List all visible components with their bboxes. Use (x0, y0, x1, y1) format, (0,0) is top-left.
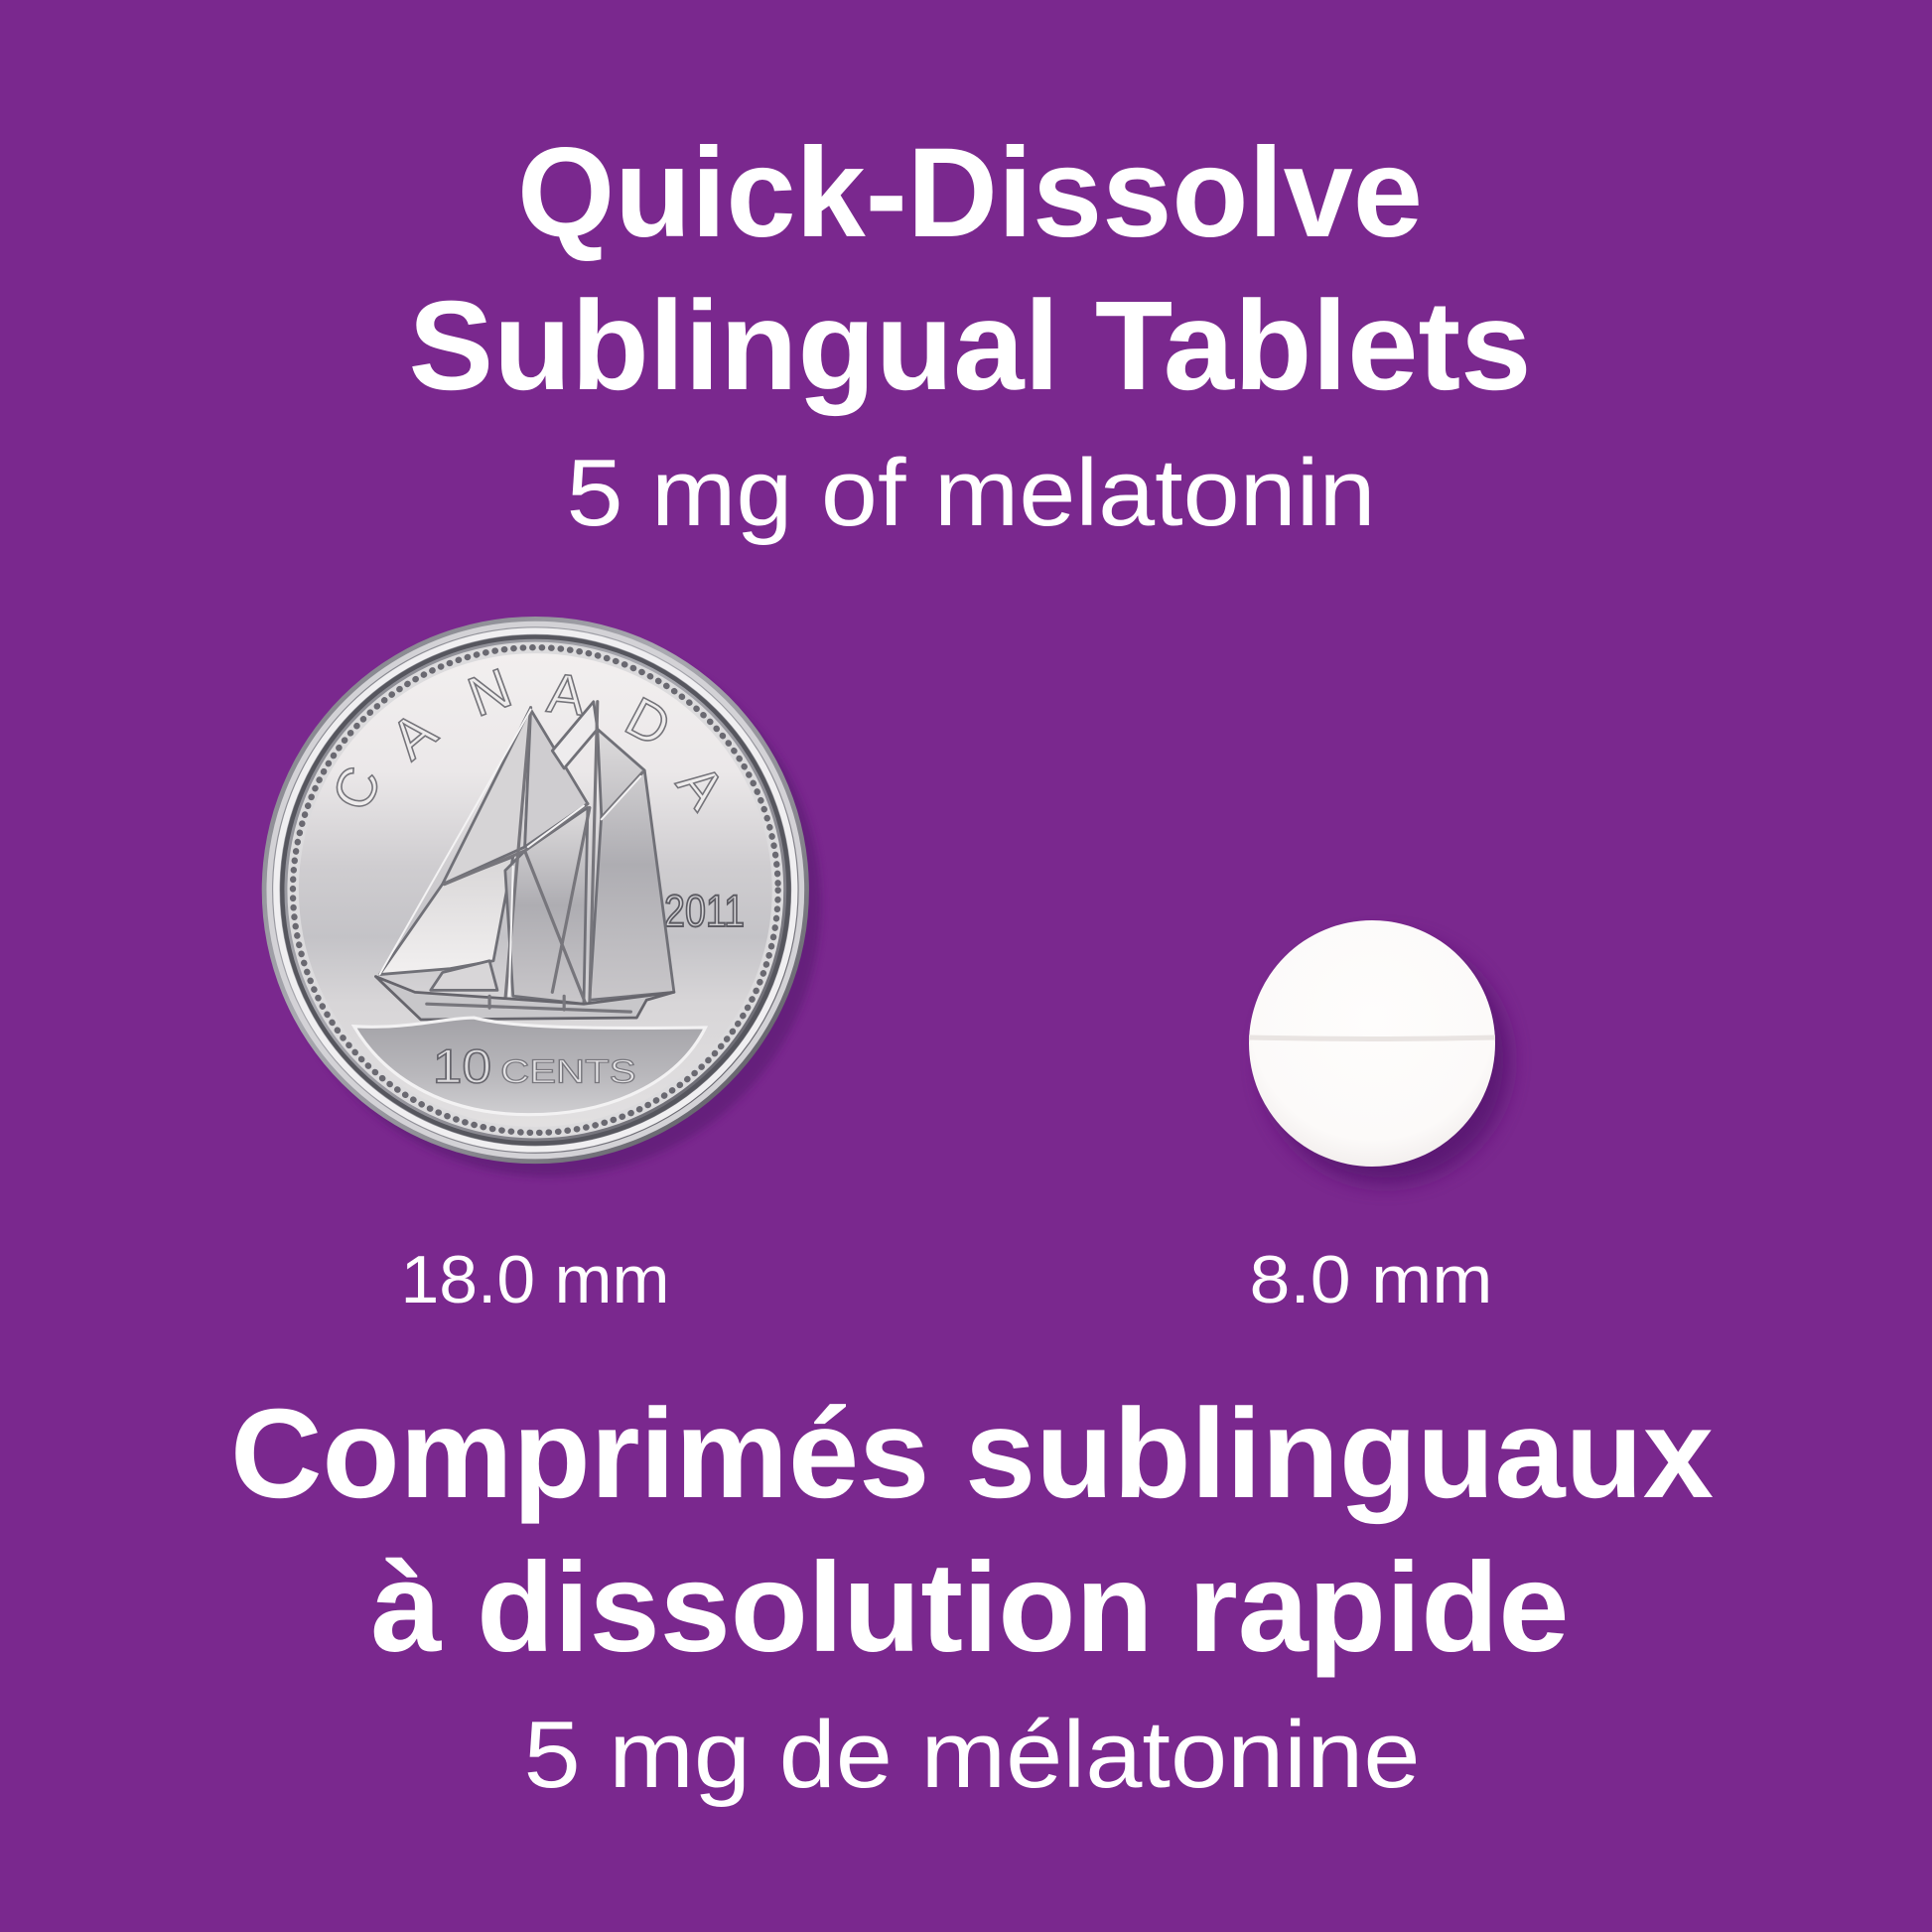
coin lettering: CANADA: A (665, 753, 738, 821)
sea with denomination: 10 (433, 1039, 491, 1093)
dime with size comparison (262, 617, 821, 1176)
coin lettering: CANADA: A (379, 699, 448, 771)
schooner (375, 702, 674, 1020)
subheading: English dose: 5 mg of melatonin (566, 440, 1376, 546)
coin lettering: CANADA: N (460, 656, 519, 729)
subheading: French dose: 5 mg de mélatonine (524, 1702, 1420, 1808)
coin lettering: CANADA: C (320, 758, 393, 818)
coin lettering: CANADA: D (616, 684, 681, 759)
sea with denomination (354, 1018, 706, 1115)
coin year: 2011 (664, 885, 745, 936)
tablet body (1249, 920, 1495, 1167)
coin lettering: CANADA: A (544, 661, 589, 727)
sea with denomination: CENTS (500, 1053, 636, 1090)
coin size label: 18.0 mm (401, 1242, 669, 1317)
tablet score line (1249, 1037, 1495, 1038)
heading: French: à dissolution rapide (371, 1537, 1569, 1679)
coin lettering: CANADA (320, 656, 738, 821)
heading: English (409, 122, 1531, 417)
tablet shadow (1262, 936, 1510, 1184)
coin rim (262, 617, 809, 1164)
tablet size label: 8.0 mm (1249, 1242, 1493, 1317)
heading: French (230, 1383, 1714, 1679)
coin shadow (276, 631, 821, 1176)
tablet (1249, 920, 1510, 1184)
heading: English: Sublingual Tablets (409, 275, 1531, 417)
heading: English: Quick-Dissolve (517, 122, 1423, 264)
heading: French: Comprimés sublinguaux (230, 1383, 1714, 1525)
